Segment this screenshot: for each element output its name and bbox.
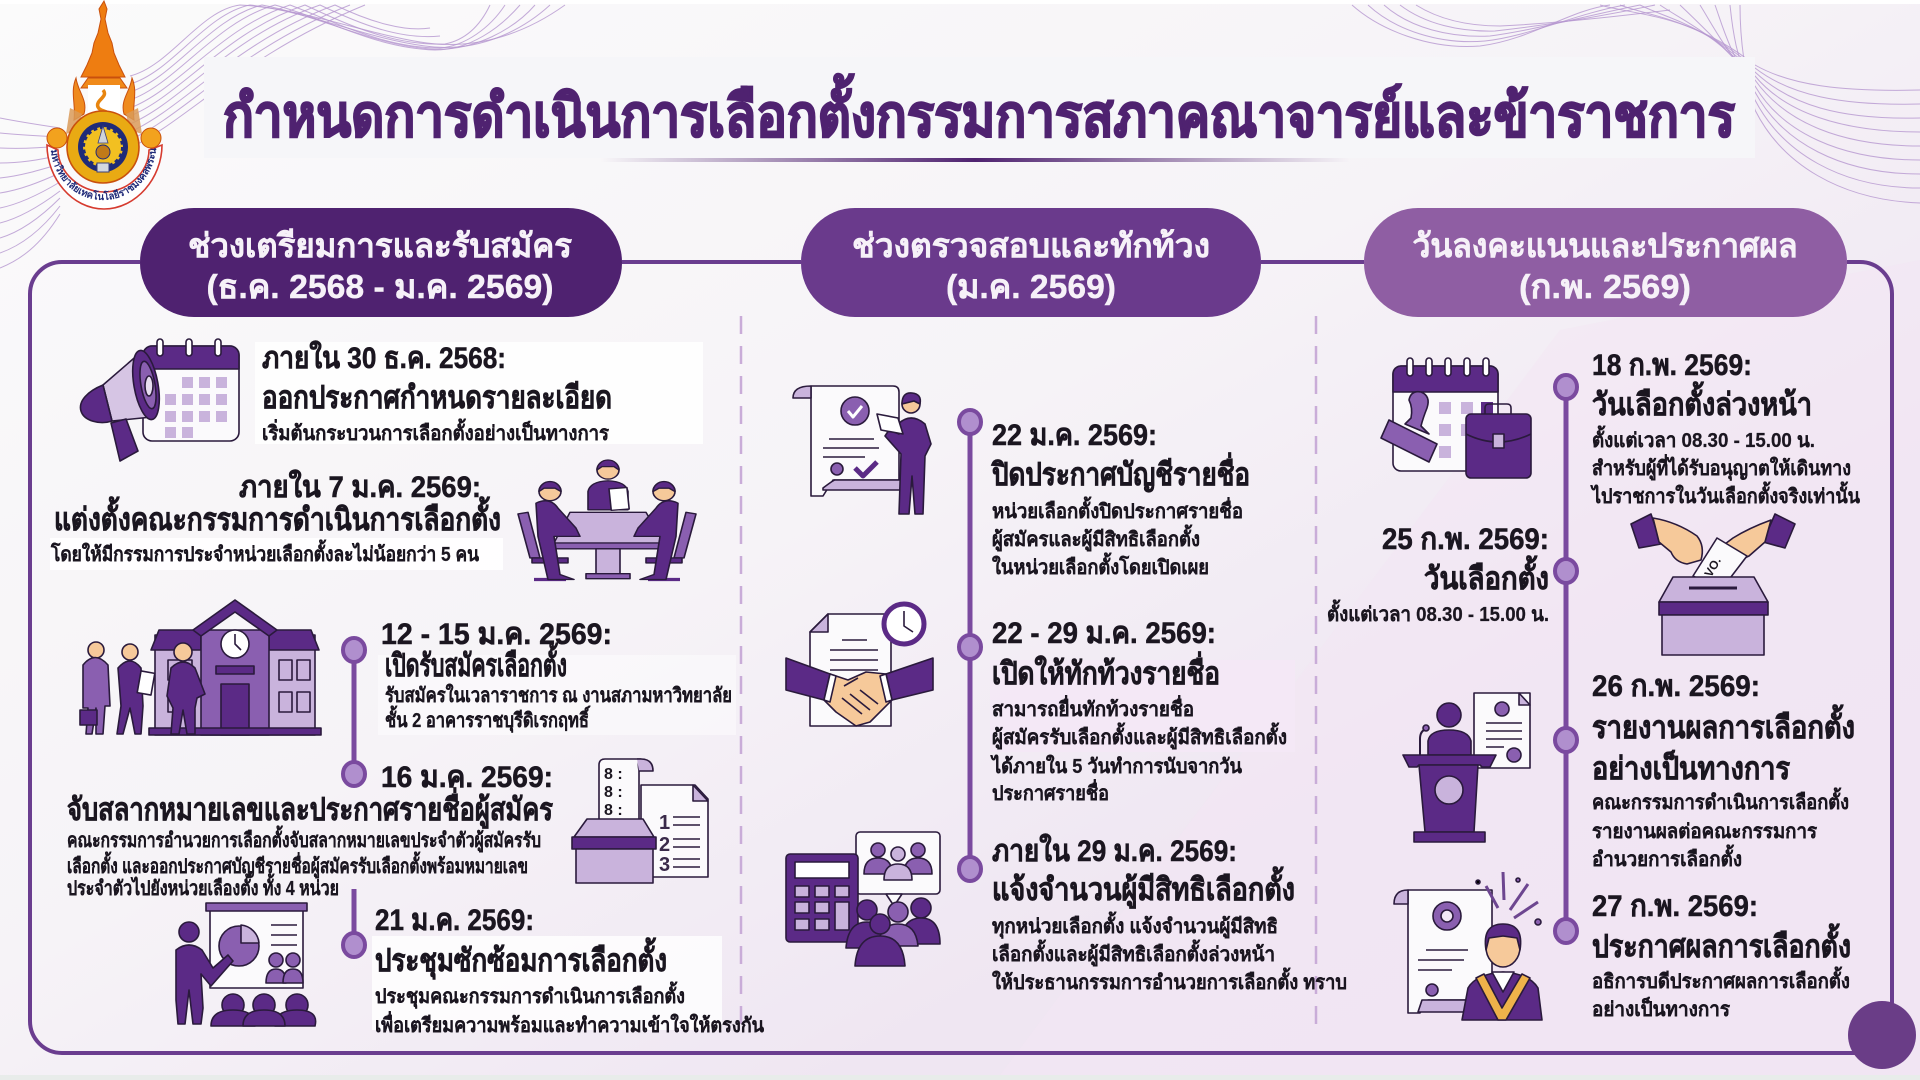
text: 22 Jan list closing: ปิดประกาศบัญชีรายชื่อ	[991, 452, 1250, 493]
text: 18 Feb advance voting: 18 ก.พ. 2569:	[1592, 349, 1752, 382]
text: 16 Jan draw: คณะกรรมการอำนวยการเลือกตั้งจับสลากหมายเลขประจำตัวผู้สมัครรับ	[67, 825, 541, 854]
text: 21 Jan rehearsal: ประชุมคณะกรรมการดำเนินการเลือกตั้ง	[375, 981, 685, 1009]
icon: ballot draw and numbered list: 8 :	[604, 784, 623, 801]
pill: vote phase heading: (ก.พ. 2569)	[1519, 268, 1691, 305]
text: 27 Feb results: อย่างเป็นทางการ	[1592, 996, 1730, 1021]
pill: review phase heading	[801, 208, 1261, 317]
text: 27 Feb results	[1592, 890, 1851, 1021]
text: 12-15 Jan applications: เปิดรับสมัครเลือกตั้ง	[385, 642, 567, 683]
text: 22 Jan list closing: ผู้สมัครและผู้มีสิทธิเลือกตั้ง	[992, 524, 1200, 553]
panel: patches behind text	[50, 342, 1295, 1030]
text: 29 Jan voter count: ภายใน 29 ม.ค. 2569:	[992, 833, 1237, 868]
text: 26 Feb report: อย่างเป็นทางการ	[1592, 749, 1790, 786]
text: 7 Jan committee: แต่งตั้งคณะกรรมการดำเนินการเลือกตั้ง	[54, 496, 501, 537]
text: 27 Feb results: ประกาศผลการเลือกตั้ง	[1592, 923, 1851, 964]
text: 16 Jan draw: เลือกตั้ง และออกประกาศบัญชีรายชื่อผู้สมัครรับเลือกตั้งพร้อมหมายเลข	[67, 851, 528, 880]
pill: preparation phase heading: ช่วงเตรียมการและรับสมัคร	[188, 227, 572, 264]
title underline	[600, 158, 1350, 162]
text: 7 Jan committee	[50, 469, 501, 566]
text: 21 Jan rehearsal: ประชุมซักซ้อมการเลือกตั้ง	[375, 937, 667, 980]
pill: review phase heading: ช่วงตรวจสอบและทักท้วง	[852, 227, 1210, 264]
pill: review phase heading: (ม.ค. 2569)	[946, 268, 1116, 305]
icon: ballot draw and numbered list: 8 :	[604, 766, 623, 783]
text: 26 Feb report: คณะกรรมการดำเนินการเลือกตั้ง	[1592, 787, 1849, 814]
text: 30 Dec announcement: ภายใน 30 ธ.ค. 2568:	[262, 340, 506, 375]
text: 25 Feb election day: วันเลือกตั้ง	[1424, 555, 1549, 596]
timeline: review column	[959, 410, 981, 881]
icon: ballot draw and numbered list: 1	[659, 812, 670, 834]
icon: hands dropping ballot in box: VO.	[1701, 555, 1724, 580]
icon: school building with people	[80, 600, 321, 735]
text: 22-29 Jan objections: 22 - 29 ม.ค. 2569:	[992, 617, 1216, 650]
text: 18 Feb advance voting	[1590, 349, 1860, 508]
text: 22 Jan list closing	[991, 419, 1250, 579]
text: 27 Feb results: อธิการบดีประกาศผลการเลือกตั้ง	[1592, 966, 1850, 993]
decorative circle bottom right	[1848, 1001, 1916, 1069]
text: 29 Jan voter count: เลือกตั้งและผู้มีสิทธิเลือกตั้งล่วงหน้า	[992, 939, 1275, 968]
text: 30 Dec announcement	[262, 340, 612, 445]
pill: vote phase heading: วันลงคะแนนและประกาศผล	[1412, 227, 1798, 264]
text: 29 Jan voter count: ทุกหน่วยเลือกตั้ง แจ้งจำนวนผู้มีสิทธิ	[992, 911, 1278, 940]
text: 29 Jan voter count: แจ้งจำนวนผู้มีสิทธิเลือกตั้ง	[992, 866, 1295, 909]
text: 21 Jan rehearsal	[375, 904, 764, 1037]
text: 30 Dec announcement: เริ่มต้นกระบวนการเลือกตั้งอย่างเป็นทางการ	[262, 418, 609, 445]
text: 26 Feb report	[1592, 670, 1855, 871]
text: 7 Jan committee: ภายใน 7 ม.ค. 2569:	[239, 469, 481, 504]
text: 26 Feb report: อำนวยการเลือกตั้ง	[1592, 844, 1742, 871]
timeline: vote column	[1555, 375, 1577, 943]
text: 26 Feb report: รายงานผลการเลือกตั้ง	[1592, 704, 1855, 745]
text: 27 Feb results: 27 ก.พ. 2569:	[1592, 890, 1758, 923]
text: 22-29 Jan objections: สามารถยื่นทักท้วงรายชื่อ	[992, 694, 1194, 721]
dashed dividers between columns	[741, 316, 1316, 1030]
text: 22-29 Jan objections: ผู้สมัครรับเลือกตั้งและผู้มีสิทธิเลือกตั้ง	[992, 722, 1287, 751]
text: 25 Feb election day	[1327, 523, 1549, 626]
text: 21 Jan rehearsal: เพื่อเตรียมความพร้อมและทำความเข้าใจให้ตรงกัน	[375, 1010, 764, 1037]
text: 16 Jan draw: จับสลากหมายเลขและประกาศรายชื่อผู้สมัคร	[67, 787, 553, 829]
icon: meeting at a table	[518, 460, 696, 580]
text: 18 Feb advance voting: ไปราชการในวันเลือกตั้งจริงเท่านั้น	[1590, 481, 1860, 508]
icon: hands dropping ballot in box	[1631, 514, 1795, 655]
title bar	[204, 57, 1755, 158]
text: 12-15 Jan applications: ชั้น 2 อาคารราชบุรีดิเรกฤทธิ์	[385, 705, 591, 733]
icon: certificate and man reading	[793, 386, 931, 514]
icon: megaphone and calendar	[80, 339, 239, 461]
timeline: preparation column	[343, 638, 365, 957]
text: 22-29 Jan objections: เปิดให้ทักท้วงรายชื่อ	[992, 651, 1220, 691]
text: 25 Feb election day: ตั้งแต่เวลา 08.30 - 15.00 น.	[1327, 599, 1549, 626]
icon: calculator and voters	[786, 832, 940, 966]
pill: preparation phase heading	[140, 208, 622, 317]
icon: presenter with chart and audience	[176, 903, 316, 1026]
text: 26 Feb report: รายงานผลต่อคณะกรรมการ	[1592, 821, 1817, 843]
icon: podium and certificate	[1403, 693, 1530, 842]
logo ribbon	[47, 145, 162, 209]
icon: handshake on document with clock	[786, 604, 933, 726]
text: 22 Jan list closing: หน่วยเลือกตั้งปิดประกาศรายชื่อ	[992, 496, 1243, 523]
text: 12-15 Jan applications	[381, 618, 732, 733]
text: 22 Jan list closing: 22 ม.ค. 2569:	[992, 419, 1157, 452]
text: 22-29 Jan objections: ประกาศรายชื่อ	[992, 778, 1109, 805]
text: 18 Feb advance voting: สำหรับผู้ที่ได้รับอนุญาตให้เดินทาง	[1592, 453, 1851, 482]
icon: ballot draw and numbered list: 2	[659, 834, 670, 856]
text: 16 Jan draw	[67, 761, 553, 900]
icon: calendar, stamp, briefcase	[1381, 358, 1531, 478]
frame: timeline outer border	[30, 262, 1892, 1053]
icon: ballot draw and numbered list: 3	[659, 854, 670, 876]
text: 18 Feb advance voting: ตั้งแต่เวลา 08.30 - 15.00 น.	[1592, 425, 1815, 452]
text: 25 Feb election day: 25 ก.พ. 2569:	[1382, 523, 1549, 556]
icon: graduate with scroll	[1394, 872, 1542, 1020]
text: 21 Jan rehearsal: 21 ม.ค. 2569:	[375, 904, 534, 937]
icon: ballot draw and numbered list	[572, 759, 708, 883]
text: 26 Feb report: 26 ก.พ. 2569:	[1592, 670, 1760, 703]
text: 12-15 Jan applications: 12 - 15 ม.ค. 2569:	[381, 618, 612, 651]
title text: กำหนดการดำเนินการเลือกตั้งกรรมการสภาคณาจารย์และข้าราชการ	[223, 74, 1735, 149]
logo: university emblem	[46, 0, 163, 210]
text: 30 Dec announcement: ออกประกาศกำหนดรายละเอียด	[262, 380, 612, 415]
text: 18 Feb advance voting: วันเลือกตั้งล่วงหน้า	[1592, 381, 1812, 422]
text: 12-15 Jan applications: รับสมัครในเวลาราชการ ณ งานสภามหาวิทยาลัย	[385, 683, 732, 707]
pill: preparation phase heading: (ธ.ค. 2568 - ม.ค. 2569)	[206, 268, 554, 305]
text: 29 Jan voter count	[992, 833, 1347, 994]
text: 22 Jan list closing: ในหน่วยเลือกตั้งโดยเปิดเผย	[992, 552, 1209, 579]
text: 29 Jan voter count: ให้ประธานกรรมการอำนวยการเลือกตั้ง ทราบ	[992, 967, 1347, 994]
text: 16 Jan draw: ประจำตัวไปยังหน่วยเลืองตั้ง ทั้ง 4 หน่วย	[67, 873, 339, 900]
pill: vote phase heading	[1364, 208, 1847, 317]
text: 7 Jan committee: โดยให้มีกรรมการประจำหน่วยเลือกตั้งละไม่น้อยกว่า 5 คน	[50, 539, 479, 566]
text: 22-29 Jan objections: ได้ภายใน 5 วันทำการนับจากวัน	[990, 754, 1242, 778]
icon: ballot draw and numbered list: 8 :	[604, 802, 623, 819]
text: 22-29 Jan objections	[990, 617, 1287, 805]
text: 16 Jan draw: 16 ม.ค. 2569:	[381, 761, 553, 794]
